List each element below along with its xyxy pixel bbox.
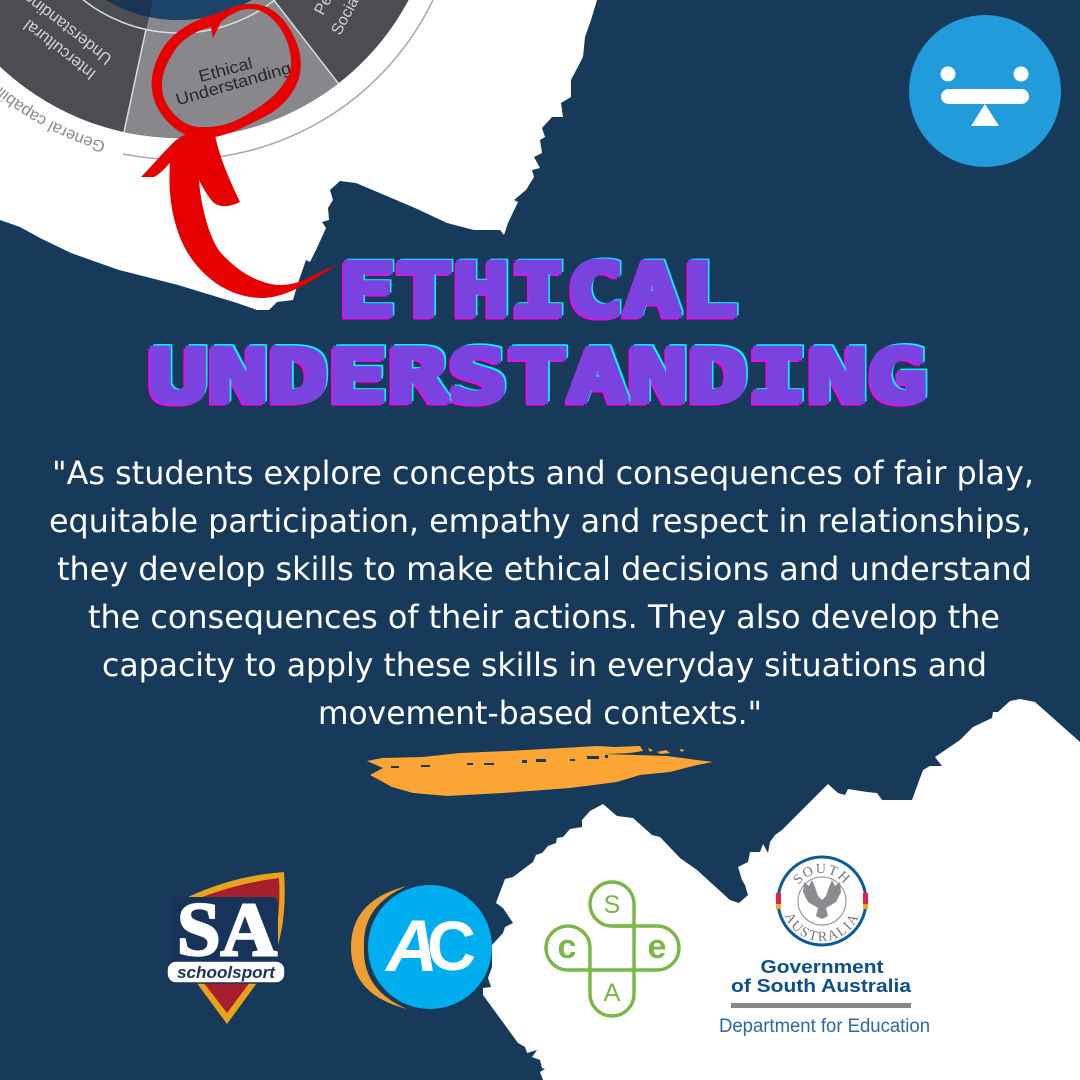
logo: AC Australian Curriculum: C bbox=[427, 907, 476, 985]
schoolsport band bbox=[167, 961, 285, 983]
logo: AC Australian Curriculum: A bbox=[384, 906, 438, 987]
wheel label: ethical understanding: Understanding bbox=[174, 59, 293, 109]
quotation text block: the consequences of their actions. They also develop the bbox=[88, 598, 1000, 636]
red hand-drawn circle bbox=[152, 4, 301, 138]
red curved arrow bbox=[141, 132, 337, 298]
shield bbox=[178, 872, 285, 1024]
quotation text block: equitable participation, empathy and respect in relationships, bbox=[49, 502, 1031, 540]
logo: SACE cross bbox=[546, 882, 679, 1016]
quotation text block: movement-based contexts." bbox=[318, 694, 762, 732]
quotation text block bbox=[49, 454, 1034, 732]
wheel label: intercultural understanding: Intercultural bbox=[20, 16, 99, 83]
orange brush stroke bbox=[367, 746, 713, 796]
torn white paper: bottom right bbox=[483, 699, 1080, 1080]
icon: ethical balance badge bbox=[909, 15, 1061, 167]
title line 1: ETHICAL bbox=[339, 249, 738, 332]
logo: AC Australian Curriculum bbox=[351, 885, 492, 1009]
logo: Government of South Australia crest bbox=[776, 856, 868, 946]
wheel: outer ring line bbox=[123, 0, 433, 160]
logo: Government of South Australia crest: SOUTH bbox=[794, 864, 850, 884]
government name text: of South Australia bbox=[731, 976, 912, 996]
government divider rule bbox=[731, 1003, 911, 1008]
department text: Department for Education bbox=[719, 1016, 930, 1037]
quotation text block: they develop skills to make ethical decisions and understand bbox=[57, 550, 1032, 588]
wheel label: personal and social bbox=[312, 0, 371, 38]
wheel: ethical understanding segment bbox=[124, 0, 338, 138]
capability wheel diagram bbox=[0, 0, 434, 160]
schoolsport text: schoolsport bbox=[177, 963, 276, 982]
logo: SACE cross: A bbox=[604, 979, 621, 1007]
quotation text block: capacity to apply these skills in everyday situations and bbox=[102, 646, 987, 684]
torn white paper: top left bbox=[0, 0, 597, 310]
wheel: inner blue hub bbox=[37, 0, 321, 20]
wheel: dark outer segments bbox=[0, 0, 439, 138]
quotation text block: "As students explore concepts and consequences of fair play, bbox=[52, 454, 1034, 492]
logo: Government of South Australia crest: AUSTRALIA bbox=[784, 914, 858, 942]
logo: SACE cross: S bbox=[604, 891, 620, 919]
wheel: segment dividers bbox=[24, 0, 338, 132]
title line 2: UNDERSTANDING bbox=[148, 335, 928, 418]
logo: SACE cross: e bbox=[648, 928, 666, 966]
government name text: Government bbox=[760, 957, 884, 977]
SA lettering backing bbox=[172, 897, 278, 963]
government name text bbox=[731, 957, 912, 996]
wheel label: ethical understanding: Ethical bbox=[197, 54, 255, 86]
SA letters: SA bbox=[177, 888, 277, 972]
logo: SA school sport bbox=[167, 872, 285, 1024]
logo: SACE cross: c bbox=[558, 928, 576, 966]
